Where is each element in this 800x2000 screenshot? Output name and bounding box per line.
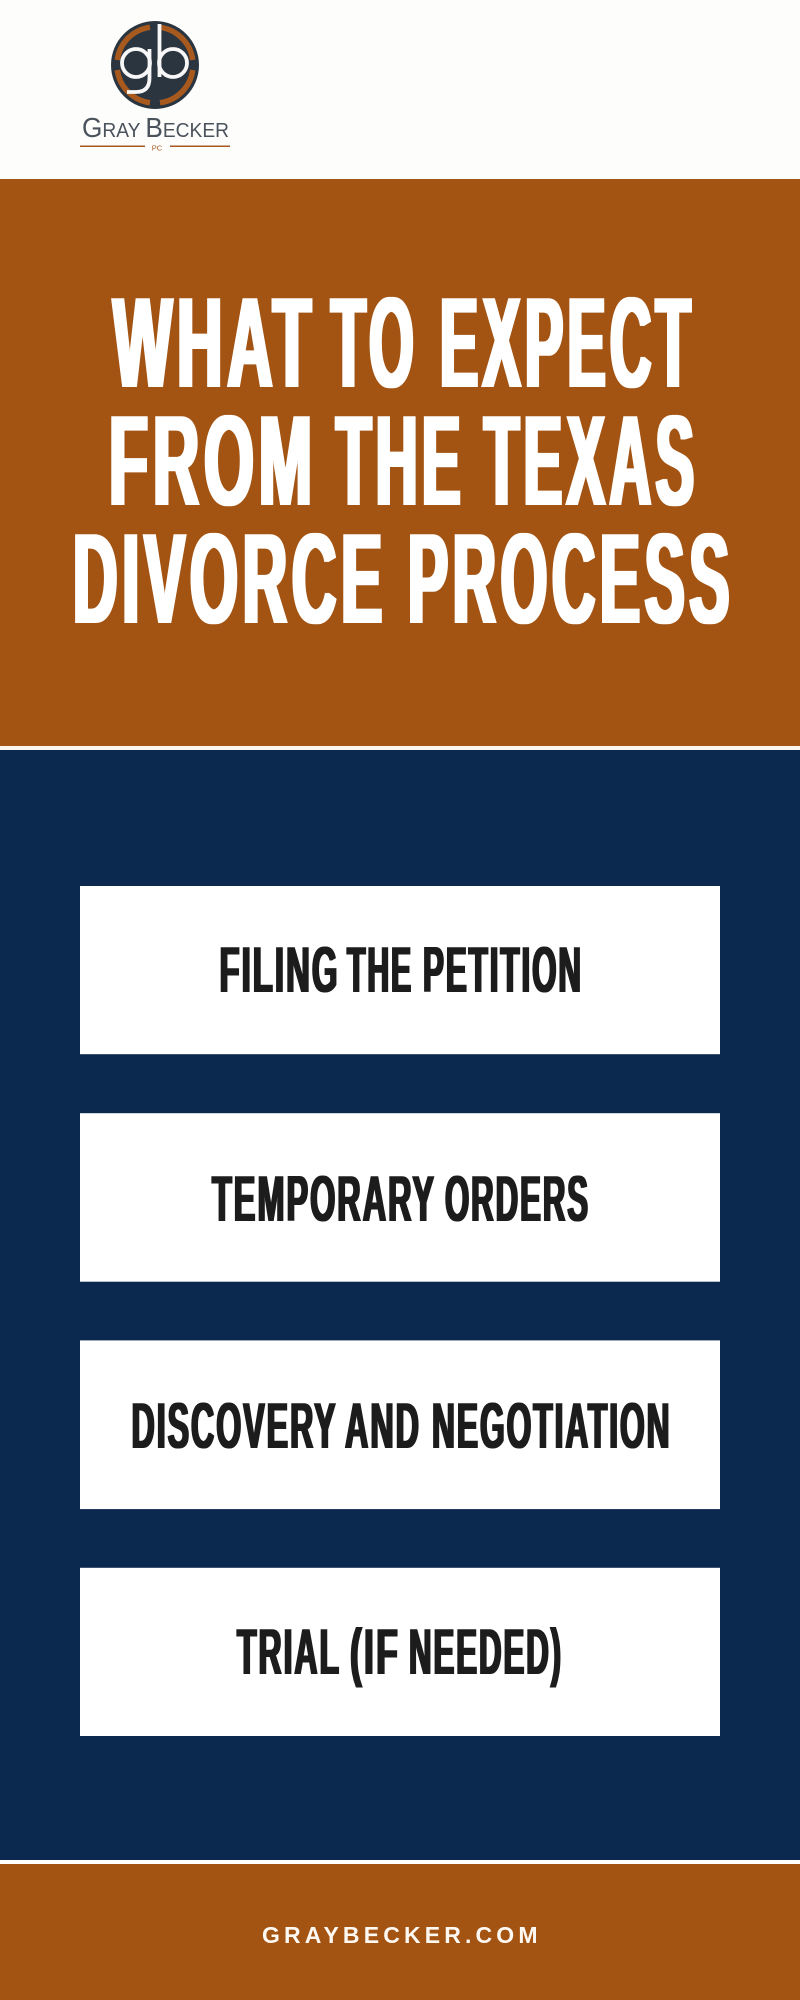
logo PC mark: PC	[152, 144, 163, 152]
step card 2	[80, 1113, 720, 1282]
panel: steps background	[0, 750, 800, 1860]
divider under title	[0, 746, 800, 750]
step label: discovery and negotiation: AND	[345, 1389, 421, 1462]
title: FROM	[109, 389, 317, 533]
logo emblem	[111, 21, 199, 109]
panel: title band	[0, 179, 800, 746]
step card 3	[80, 1340, 720, 1509]
title	[73, 271, 734, 651]
step label: temporary orders: TEMPORARY	[212, 1162, 436, 1235]
title: THE	[336, 389, 465, 533]
step label: discovery and negotiation: DISCOVERY	[132, 1389, 338, 1462]
step card 1: PETITION	[423, 933, 583, 1006]
logo rule left	[80, 146, 145, 147]
step label: trial (if needed)	[237, 1615, 563, 1688]
step card 2: ORDERS	[445, 1162, 590, 1235]
footer website: GRAYBECKER.COM	[262, 1922, 538, 1948]
title: WHAT	[113, 271, 316, 415]
panel: footer band	[0, 1864, 800, 2000]
logo wordmark: GRAY BECKER	[82, 112, 229, 143]
panel: logo header	[0, 0, 800, 179]
divider above footer	[0, 1860, 800, 1864]
step card 1	[80, 886, 720, 1054]
step label: filing the petition: FILING	[220, 933, 340, 1006]
logo: Gray Becker PC	[80, 21, 230, 152]
step label: filing the petition	[220, 933, 583, 1006]
step label: filing the petition: THE	[347, 933, 413, 1006]
step card 4	[80, 1568, 720, 1736]
step label: trial (if needed): (IF	[350, 1615, 400, 1688]
title: TO	[331, 271, 418, 415]
step card 4: NEEDED)	[409, 1615, 563, 1688]
title: DIVORCE	[73, 507, 387, 651]
logo rule right	[170, 146, 230, 147]
step label: trial (if needed): TRIAL	[237, 1615, 341, 1688]
